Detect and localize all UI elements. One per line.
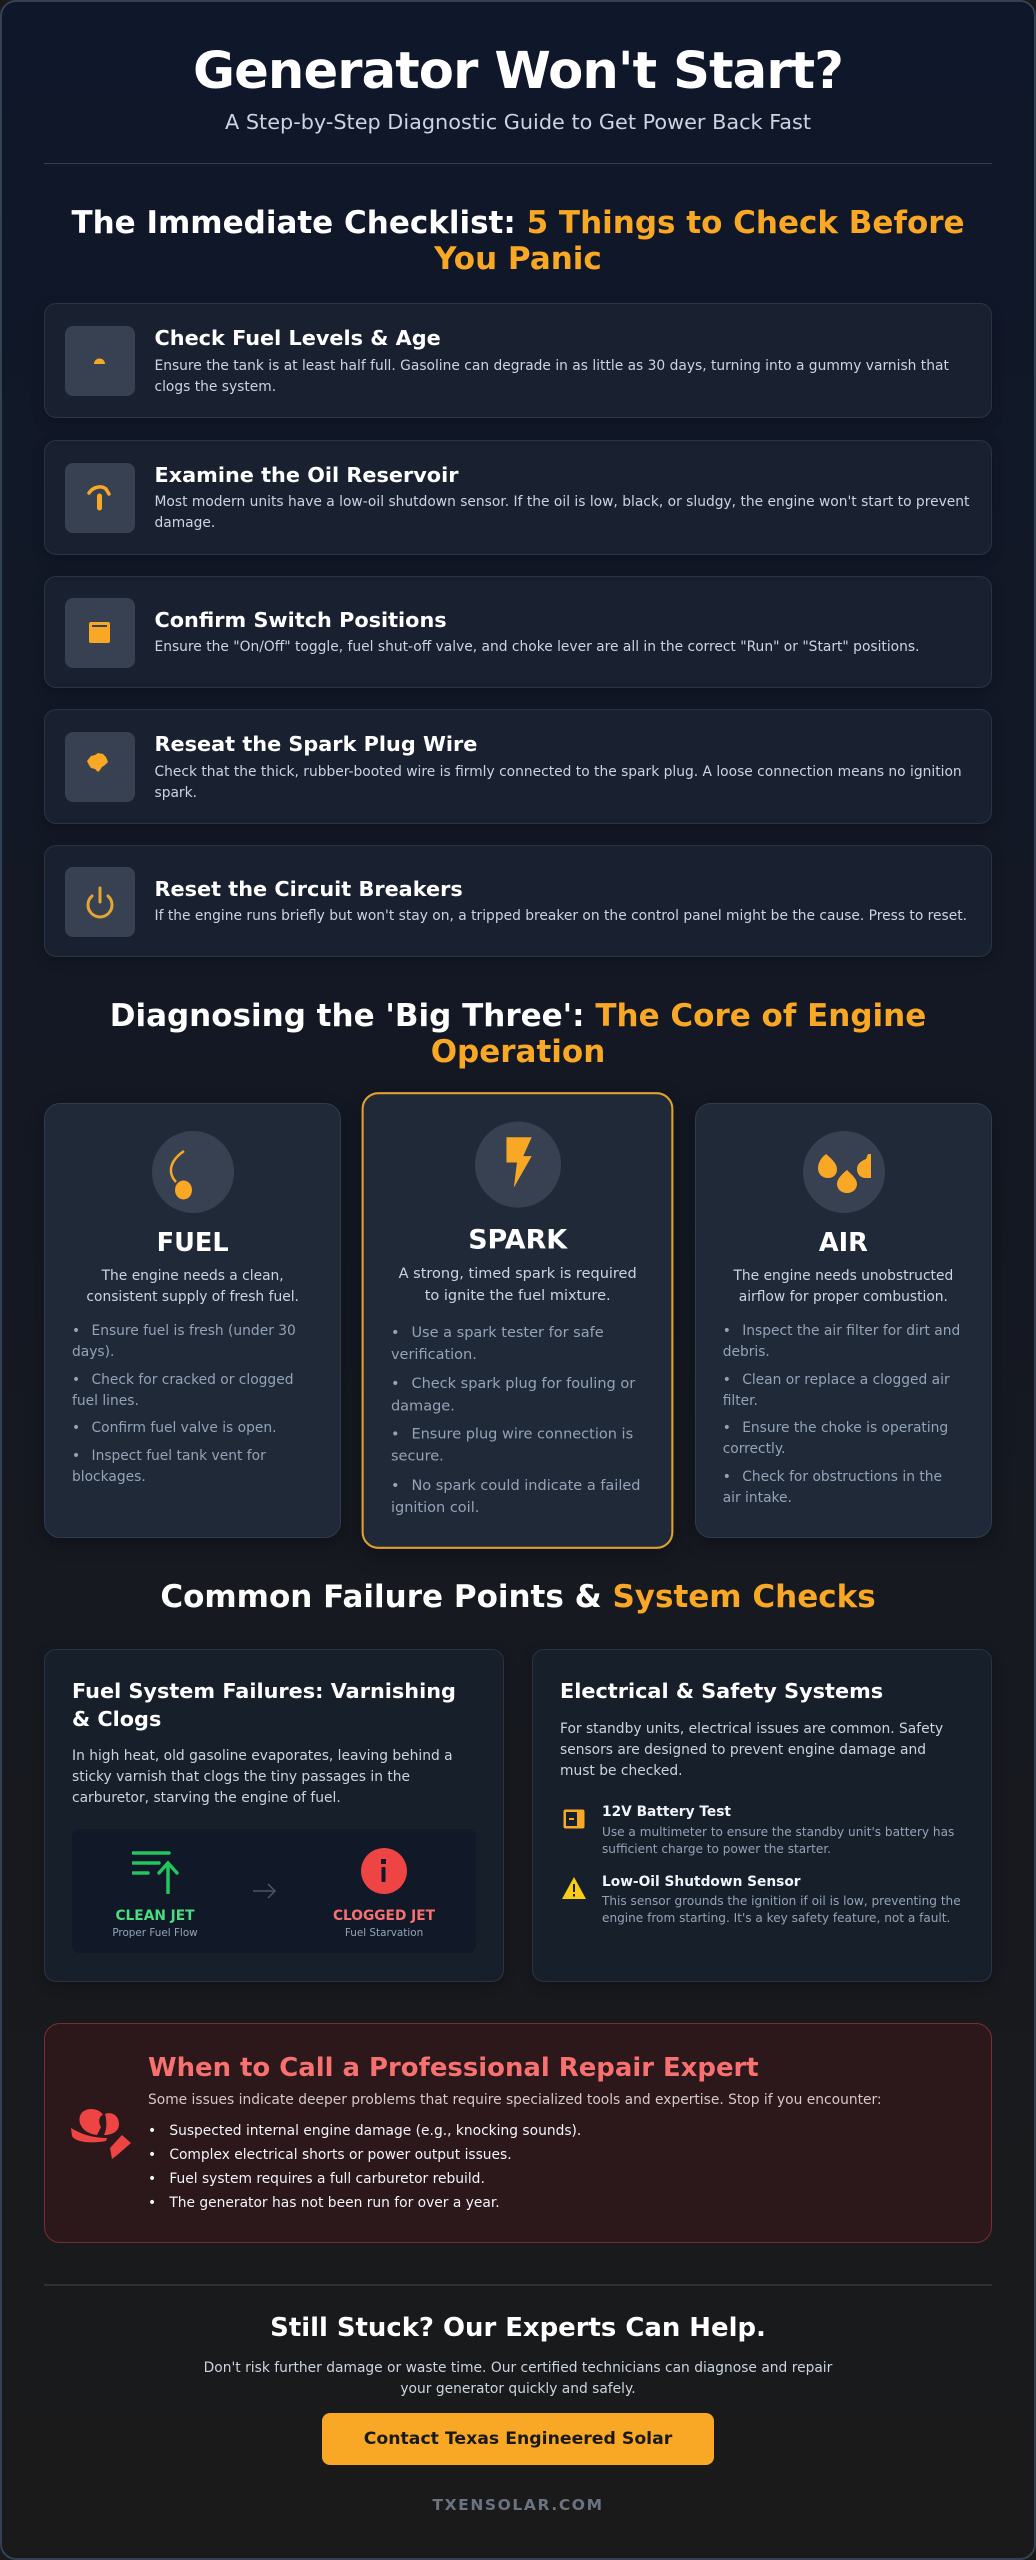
card text bbox=[154, 358, 949, 395]
fuel list: blockages. bbox=[72, 1468, 146, 1484]
battery item text bbox=[602, 1824, 954, 1856]
air list: Clean or replace a clogged air bbox=[742, 1372, 950, 1388]
checklist card: oil bbox=[44, 440, 992, 555]
fuel list: Inspect fuel tank vent for bbox=[92, 1448, 266, 1464]
card text: Most modern units have a low-oil shutdown sensor. If the oil is low, black, or sludgy, the engine won't start to prevent bbox=[154, 494, 969, 510]
jet comparison bbox=[72, 1829, 476, 1953]
spark list: ignition coil. bbox=[391, 1499, 479, 1516]
icon: air drops bbox=[803, 1131, 885, 1213]
panel: fuel system failures bbox=[44, 1649, 504, 1982]
spark label: SPARK bbox=[468, 1224, 567, 1256]
panel: fuel bbox=[44, 1103, 341, 1538]
panel: electrical and safety bbox=[532, 1649, 992, 1982]
checklist card: spark plug bbox=[44, 709, 992, 824]
button: contact bbox=[322, 2413, 714, 2465]
panel text: carburetor, starving the engine of fuel. bbox=[72, 1790, 341, 1806]
spark list bbox=[391, 1324, 641, 1516]
heading: big three bbox=[110, 998, 926, 1070]
callout list: • Fuel system requires a full carburetor rebuild. bbox=[148, 2171, 485, 2187]
heading: immediate checklist: You Panic bbox=[434, 241, 602, 277]
checklist card: breakers bbox=[44, 845, 992, 957]
fuel description bbox=[86, 1268, 299, 1305]
icon: switch bbox=[65, 598, 135, 668]
panel text: must be checked. bbox=[560, 1763, 682, 1779]
icon: power bbox=[65, 867, 135, 937]
air list: filter. bbox=[723, 1392, 758, 1408]
fuel description: The engine needs a clean, bbox=[102, 1268, 284, 1284]
icon: clean jet bbox=[132, 1851, 179, 1894]
sensor item title: Low-Oil Shutdown Sensor bbox=[602, 1874, 801, 1890]
icon: repair bbox=[71, 2109, 131, 2159]
spark list: verification. bbox=[391, 1346, 477, 1363]
callout title: When to Call a Professional Repair Expert bbox=[148, 2053, 759, 2083]
panel: air bbox=[695, 1103, 992, 1538]
spark list: Use a spark tester for safe bbox=[411, 1324, 604, 1341]
callout list: • Suspected internal engine damage (e.g., knocking sounds). bbox=[148, 2123, 581, 2139]
air list: • bbox=[723, 1468, 731, 1484]
heading: immediate checklist bbox=[71, 205, 965, 277]
panel title: & Clogs bbox=[72, 1706, 161, 1730]
sensor item text bbox=[602, 1894, 961, 1925]
heading: failure points: Common Failure Points & System Checks bbox=[160, 1579, 876, 1615]
fuel list: • bbox=[72, 1420, 80, 1436]
title: Generator Won't Start? bbox=[193, 41, 843, 101]
spark list: secure. bbox=[391, 1448, 444, 1465]
arrow bbox=[253, 1884, 276, 1898]
callout list: • The generator has not been run for over a year. bbox=[148, 2195, 500, 2211]
fuel list: Confirm fuel valve is open. bbox=[92, 1420, 276, 1436]
panel text bbox=[560, 1721, 943, 1779]
air list: air intake. bbox=[723, 1490, 792, 1506]
panel: spark bbox=[362, 1092, 674, 1549]
sensor item text: engine from starting. It's a key safety feature, not a fault. bbox=[602, 1911, 950, 1925]
spark description: to ignite the fuel mixture. bbox=[425, 1287, 611, 1304]
fuel list: Check for cracked or clogged bbox=[92, 1372, 293, 1388]
clogged jet caption: Fuel Starvation bbox=[345, 1927, 423, 1939]
icon: fuel bbox=[65, 326, 135, 396]
battery item text: sufficient charge to power the starter. bbox=[602, 1842, 831, 1856]
checklist card: fuel bbox=[44, 303, 992, 418]
panel: call a professional bbox=[44, 2023, 992, 2243]
subtitle: A Step-by-Step Diagnostic Guide to Get Power Back Fast bbox=[225, 110, 811, 134]
clean jet caption: Proper Fuel Flow bbox=[112, 1927, 198, 1939]
air description bbox=[733, 1268, 953, 1305]
closing text bbox=[204, 2360, 832, 2397]
air list: Ensure the choke is operating bbox=[742, 1420, 948, 1436]
fuel list: • bbox=[72, 1448, 80, 1464]
air list bbox=[723, 1323, 960, 1506]
air list: Check for obstructions in the bbox=[742, 1468, 942, 1484]
closing text: your generator quickly and safely. bbox=[400, 2381, 636, 2397]
air list: debris. bbox=[723, 1344, 770, 1360]
card text: Check that the thick, rubber-booted wire is firmly connected to the spark plug. A loose connection means no ignition bbox=[154, 764, 962, 780]
card text: clogs the system. bbox=[154, 379, 276, 395]
clogged jet label: CLOGGED JET bbox=[333, 1908, 435, 1924]
icon: spark plug bbox=[65, 732, 135, 802]
spark list: • bbox=[391, 1324, 400, 1341]
spark list: Check spark plug for fouling or bbox=[411, 1375, 635, 1392]
callout list bbox=[148, 2123, 581, 2211]
fuel label: FUEL bbox=[157, 1228, 229, 1258]
panel text bbox=[72, 1748, 453, 1806]
fuel description: consistent supply of fresh fuel. bbox=[86, 1289, 299, 1305]
card title: Reset the Circuit Breakers bbox=[154, 877, 463, 901]
heading: immediate checklist: The Immediate Checklist: 5 Things to Check Before bbox=[71, 205, 965, 241]
card title: Confirm Switch Positions bbox=[154, 608, 447, 632]
fuel list: • bbox=[72, 1323, 80, 1339]
sensor item text: This sensor grounds the ignition if oil is low, preventing the bbox=[602, 1894, 961, 1908]
spark description bbox=[398, 1265, 637, 1304]
spark list: No spark could indicate a failed bbox=[411, 1477, 641, 1494]
air list: • bbox=[723, 1323, 731, 1339]
card title: Check Fuel Levels & Age bbox=[154, 326, 441, 350]
card text bbox=[154, 494, 970, 531]
air list: • bbox=[723, 1420, 731, 1436]
air description: airflow for proper combustion. bbox=[739, 1289, 948, 1305]
card text bbox=[154, 764, 962, 801]
air description: The engine needs unobstructed bbox=[733, 1268, 953, 1284]
spark list: damage. bbox=[391, 1397, 455, 1414]
card text: Ensure the tank is at least half full. Gasoline can degrade in as little as 30 days, turning into a gummy varnish that bbox=[154, 358, 949, 374]
callout intro: Some issues indicate deeper problems that require specialized tools and expertise. Stop if you encounter: bbox=[148, 2092, 882, 2108]
icon: clogged jet bbox=[361, 1848, 407, 1894]
battery item title: 12V Battery Test bbox=[602, 1804, 731, 1820]
panel title bbox=[72, 1678, 456, 1730]
callout list: • Complex electrical shorts or power output issues. bbox=[148, 2147, 512, 2163]
closing text: Don't risk further damage or waste time. Our certified technicians can diagnose and repair bbox=[204, 2360, 832, 2376]
fuel list bbox=[72, 1323, 296, 1484]
icon: fuel drop bbox=[152, 1131, 234, 1213]
air list: • bbox=[723, 1372, 731, 1388]
heading: big three: Diagnosing the 'Big Three': The Core of Engine bbox=[110, 998, 926, 1034]
icon: battery bbox=[564, 1810, 584, 1828]
fuel list: days). bbox=[72, 1344, 114, 1360]
icon: lightning bolt bbox=[475, 1122, 561, 1208]
card text: spark. bbox=[154, 785, 197, 801]
panel text: For standby units, electrical issues are common. Safety bbox=[560, 1721, 943, 1737]
spark list: • bbox=[391, 1426, 400, 1443]
icon: oil bbox=[65, 463, 135, 533]
spark list: Ensure plug wire connection is bbox=[411, 1426, 633, 1443]
card text: damage. bbox=[154, 515, 215, 531]
card text: If the engine runs briefly but won't stay on, a tripped breaker on the control panel might be the cause. Press to reset. bbox=[154, 908, 967, 924]
heading: big three: Operation bbox=[431, 1034, 605, 1070]
icon: warning bbox=[562, 1877, 586, 1899]
battery item text: Use a multimeter to ensure the standby unit's battery has bbox=[602, 1824, 954, 1838]
panel text: In high heat, old gasoline evaporates, leaving behind a bbox=[72, 1748, 453, 1764]
panel text: sticky varnish that clogs the tiny passages in the bbox=[72, 1769, 410, 1785]
card title: Reseat the Spark Plug Wire bbox=[154, 732, 477, 756]
spark list: • bbox=[391, 1375, 400, 1392]
air list: Inspect the air filter for dirt and bbox=[742, 1323, 960, 1339]
air list: correctly. bbox=[723, 1441, 785, 1457]
clean jet label: CLEAN JET bbox=[115, 1908, 195, 1924]
card title: Examine the Oil Reservoir bbox=[154, 463, 458, 487]
panel title: Fuel System Failures: Varnishing bbox=[72, 1678, 456, 1702]
button: contact: Contact Texas Engineered Solar bbox=[364, 2429, 672, 2449]
spark description: A strong, timed spark is required bbox=[399, 1265, 637, 1282]
air label: AIR bbox=[819, 1228, 868, 1258]
checklist card: switch bbox=[44, 576, 992, 688]
spark list: • bbox=[391, 1477, 400, 1494]
panel title: Electrical & Safety Systems bbox=[560, 1678, 883, 1702]
fuel list: • bbox=[72, 1372, 80, 1388]
fuel list: fuel lines. bbox=[72, 1392, 139, 1408]
fuel list: Ensure fuel is fresh (under 30 bbox=[92, 1323, 296, 1339]
footer url: TXENSOLAR.COM bbox=[432, 2496, 604, 2514]
panel text: sensors are designed to prevent engine damage and bbox=[560, 1742, 926, 1758]
heading: still stuck: Still Stuck? Our Experts Can Help. bbox=[270, 2313, 766, 2343]
card text: Ensure the "On/Off" toggle, fuel shut-off valve, and choke lever are all in the correct "Run" or "Start" positions. bbox=[154, 639, 919, 655]
